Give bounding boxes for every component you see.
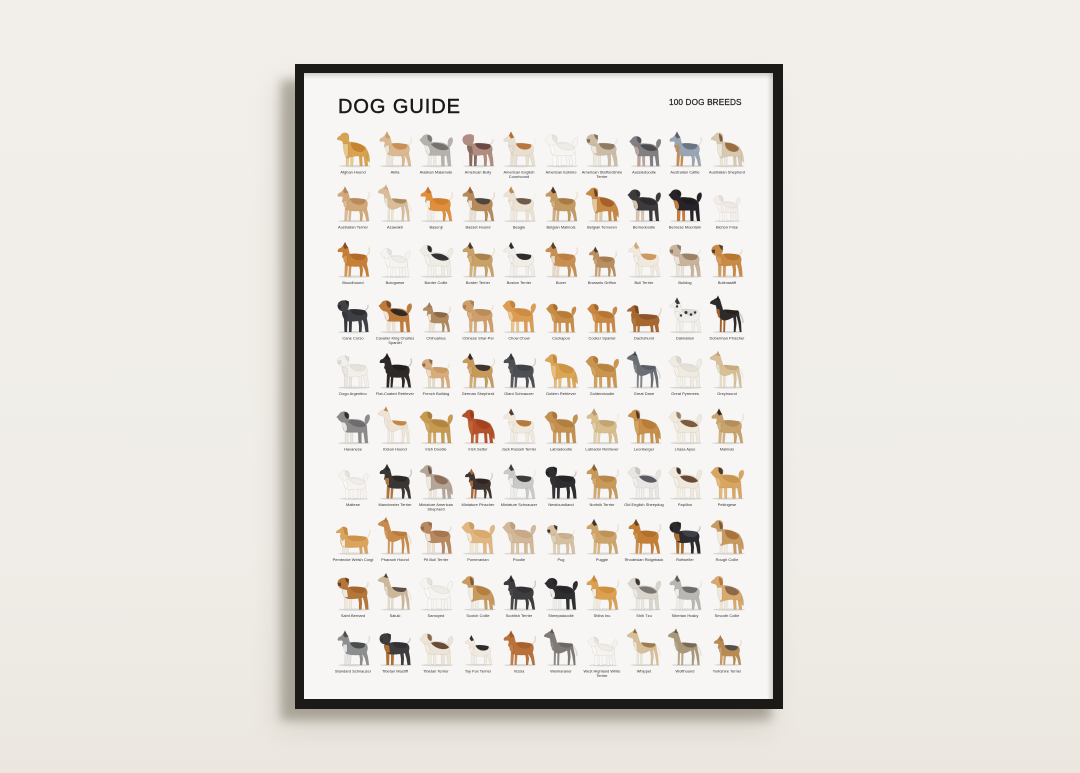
dog: French Bulldog [422,359,451,396]
dog: Azawakh: Azawakh [387,224,403,230]
dog: Dachshund: Dachshund [634,336,654,340]
dog: Pug [547,525,576,562]
dog: Labradoodle [544,412,578,452]
dog: Border Terrier: Border Terrier [466,280,491,285]
dog: Giant Schnauzer [504,353,536,396]
dog: Puggle [587,519,619,562]
dog: Newfoundland: Newfoundland [548,502,574,507]
dog: Australian Cattle [670,132,702,174]
dog: Rottweiler: Rottweiler [676,557,695,562]
dog: Manchester Terrier: Manchester Terrier [378,502,412,507]
dog: Maltese [338,470,368,507]
dog: Australian Terrier [338,186,370,230]
breed grid [333,132,745,678]
dog: Basenji [421,186,453,230]
dog: Whippet: Whippet [637,668,652,674]
poster frame [295,64,783,709]
row 6 [336,406,744,452]
dog: Akita [380,132,412,174]
dog: Bernedoodle: Bernedoodle [633,224,655,230]
dog: Great Pyrenees: Great Pyrenees [671,391,699,396]
dog: Chihuahua [423,302,451,340]
dog: Vizsla [504,630,536,674]
dog: Miniature American Shepherd: Shepherd [427,506,445,511]
dog: Bull Terrier: Bull Terrier [634,280,654,285]
dog: Chinese Shar-Pei [462,300,495,340]
dog: Australian Cattle: Australian Cattle [670,170,700,174]
dog: Lhasa Apso [668,412,702,452]
dog: Pit Bull Terrier: Pit Bull Terrier [424,557,449,562]
dog: Belgian Tervuren [586,188,620,230]
dog: Siberian Husky: Siberian Husky [672,613,698,618]
dog: Labrador Retriever [585,408,619,452]
dog: Samoyed: Samoyed [428,613,444,618]
dog: Goldendoodle: Goldendoodle [590,391,614,396]
dog: Border Collie [420,245,453,285]
row 7 [338,464,744,511]
dog: Afghan Hound [337,133,371,174]
dog: Norfolk Terrier [587,464,619,507]
dog: Miniature Schnauzer: Miniature Schnauzer [501,502,538,507]
dog: Shih Tzu [628,578,661,618]
dog: Irish Setter: Irish Setter [468,446,488,452]
dog: Rhodesian Ridgeback: Rhodesian Ridgeback [625,557,663,562]
dog: Bull Terrier [629,242,661,285]
dog: Flat-Coated Retriever: Flat-Coated Retriever [376,391,415,396]
dog: Chinese Shar-Pei: Chinese Shar-Pei [462,336,494,340]
dog: Shiba Inu: Shiba Inu [594,613,610,618]
dog: Boston Terrier: Boston Terrier [507,280,532,285]
frame shadow [278,80,771,728]
dog: Weimaraner: Weimaraner [550,668,572,674]
dog: Belgian Malinois [546,186,578,230]
dog: American English Coonhound: American English [504,170,534,174]
dog: Scottish Terrier [504,575,536,618]
dog: American Bully [462,134,495,174]
dog: Sheepadoodle [544,578,578,618]
dog: Scotch Collie [462,576,496,618]
dog: Bloodhound [338,242,370,285]
dog: Rottweiler [670,522,702,562]
dog: Leonberger: Leonberger [634,446,655,452]
dog: Bernedoodle [628,190,661,230]
row 4 [338,296,745,345]
dog: Pekingese: Pekingese [718,502,736,507]
dog: Scotch Collie: Scotch Collie [466,613,490,618]
dog: Smooth Collie: Smooth Collie [715,613,739,618]
dog: Aussiedoodle: Aussiedoodle [632,170,656,174]
dog: German Shepherd [462,353,495,396]
dog: Cavalier King Charles Spaniel: Cavalier King Charles [376,336,414,340]
dog: West Highland White Terrier: Terrier [596,673,608,678]
dog: Malinois [712,408,744,452]
dog: Basset Hound [463,186,495,230]
dog: West Highland White Terrier [583,637,621,678]
dog: Bichon Frise [713,195,740,230]
dog: Pit Bull Terrier [420,522,453,562]
dog: Akita: Akita [391,170,400,174]
row 9 [338,573,745,618]
dog: Weimaraner [544,628,577,674]
dog: Newfoundland [546,466,578,507]
dog: Miniature Pinscher: Miniature Pinscher [462,502,495,507]
dog: Golden Retriever: Golden Retriever [546,391,577,396]
dog: Cocker Spaniel: Cocker Spaniel [589,336,616,340]
dog: Saluki [378,573,411,618]
dog: Rough Collie [711,520,745,562]
dog: Pug: Pug [557,557,565,562]
dog: Smooth Collie [711,576,745,618]
dog: Sheepadoodle: Sheepadoodle [548,613,574,618]
dog: Belgian Malinois: Belgian Malinois [547,224,575,230]
dog: Bullmastiff [712,244,744,285]
dog: Malinois: Malinois [720,446,734,452]
dog: Brussels Griffon: Brussels Griffon [588,280,616,285]
dog: Doberman Pinscher: Doberman Pinscher [709,336,745,340]
dog: Siberian Husky [670,575,702,618]
dog: Bernese Mountain: Bernese Mountain [669,224,701,230]
dog: American English Coonhound [504,132,536,179]
dog: Rough Collie: Rough Collie [716,557,738,562]
dog: Cocker Spaniel [587,304,617,340]
dog: American Eskimo: American Eskimo [546,170,576,174]
dog: Manchester Terrier [378,464,412,507]
dog: Standard Schnauzer [335,630,372,674]
dog: Belgian Tervuren: Belgian Tervuren [587,224,617,230]
dog: Bulldog [670,244,702,285]
dog: Yorkshire Terrier: Yorkshire Terrier [713,668,742,674]
dog: Chow Chow: Chow Chow [508,336,530,340]
row 2 [338,184,740,230]
dog: Golden Retriever [545,354,579,396]
dog: Standard Schnauzer: Standard Schnauzer [335,668,372,674]
dog: Ibizan Hound [378,406,411,452]
dog: Cane Corso: Cane Corso [342,336,364,340]
dog: Bullmastiff: Bullmastiff [718,280,737,285]
dog: Puggle: Puggle [596,557,608,562]
dog: Greyhound [710,351,743,396]
dog: Dalmatian [670,298,702,340]
dog: Cockapoo: Cockapoo [552,336,570,340]
dog: Brussels Griffon [588,247,617,285]
dog: Afghan Hound: Afghan Hound [340,170,366,174]
dog: Tibetan Terrier: Tibetan Terrier [423,668,449,674]
dog: Great Dane [627,351,660,396]
dog: Dogo Argentino [338,356,370,396]
dog: Irish Doodle [420,412,453,452]
dog: American Bully: American Bully [465,170,491,174]
dog: Old English Sheepdog [624,467,664,507]
dog: Chihuahua: Chihuahua [426,336,446,340]
dog: Boxer: Boxer [556,280,567,285]
dog: Pharaoh Hound: Pharaoh Hound [381,557,409,562]
dog: Norfolk Terrier: Norfolk Terrier [590,502,615,507]
dog: Miniature American Shepherd: Miniature American [419,502,453,507]
dog: Doberman Pinscher [709,296,745,340]
dog: Dogo Argentino: Dogo Argentino [339,391,367,396]
dog: Alaskan Malamute [420,134,453,174]
dog: Pomeranian: Pomeranian [467,557,489,562]
dog: Bloodhound: Bloodhound [342,280,364,285]
dog: Bolognese [380,248,410,285]
dog: Ibizan Hound: Ibizan Hound [383,446,407,452]
dog: Alaskan Malamute: Alaskan Malamute [420,170,452,174]
dog: Pekingese [710,467,744,507]
dog: Bolognese: Bolognese [386,280,404,285]
dog: Cane Corso [338,300,370,340]
title: DOG GUIDE [338,96,460,118]
dog: Wolfhound [668,628,701,674]
dog: American Staffordshire Terrier: American Staffordshire [582,170,622,174]
dog: Greyhound: Greyhound [717,391,737,396]
dog: Shiba Inu [587,575,619,618]
row 10 [335,628,742,678]
dog: Great Dane: Great Dane [634,391,654,396]
dog: Beagle: Beagle [513,224,525,230]
dog: Jack Russell Terrier [502,408,537,452]
dog: Miniature Schnauzer [501,464,538,507]
dog: Pomeranian [462,522,495,562]
dog: Bulldog: Bulldog [678,280,692,285]
dog: Cockapoo [546,304,576,340]
dog: Havanese [336,412,370,452]
dog: Shih Tzu: Shih Tzu [636,613,652,618]
dog: Wolfhound: Wolfhound [676,668,694,674]
dog: Chow Chow [502,300,536,340]
dog: Basset Hound: Basset Hound [466,224,490,230]
dog: West Highland White Terrier: West Highland White [583,668,621,674]
dog: Australian Shepherd: Australian Shepherd [709,170,745,174]
dog: Saluki: Saluki [390,613,401,618]
dog: Tibetan Mastiff [380,633,412,674]
dog: Cavalier King Charles Spaniel: Spaniel [388,340,402,345]
dog: Toy Fox Terrier: Toy Fox Terrier [465,668,492,674]
dog: Yorkshire Terrier [713,635,742,674]
dog: American Eskimo [544,134,578,174]
dog: Whippet [627,628,660,674]
dog: Giant Schnauzer: Giant Schnauzer [504,391,534,396]
dog: Saint Bernard: Saint Bernard [341,613,365,618]
dog: Tibetan Terrier [420,634,453,674]
dog: Saint Bernard [338,578,370,618]
row 1 [337,132,745,179]
dog: Pembroke Welsh Corgi: Pembroke Welsh Corgi [333,557,373,562]
dog: Dachshund [627,305,661,340]
dog: Pharaoh Hound [378,517,411,562]
dog: Cavalier King Charles Spaniel [376,300,414,345]
dog: Border Terrier [463,242,495,285]
dog: American Staffordshire Terrier: Terrier [596,174,608,179]
row 3 [338,242,744,285]
dog: Jack Russell Terrier: Jack Russell Terrier [502,446,537,452]
dog: Boston Terrier [504,242,536,285]
dog: Vizsla: Vizsla [514,668,525,674]
dog: Irish Doodle: Irish Doodle [425,446,447,452]
dog: Aussiedoodle [629,136,661,174]
row 8 [333,517,745,562]
dog: Tibetan Mastiff: Tibetan Mastiff [382,668,409,674]
dog: Poodle: Poodle [513,557,525,562]
dog: Azawakh [378,184,411,230]
dog: American Staffordshire Terrier [582,134,622,179]
dog: Samoyed [420,578,453,618]
subtitle: 100 dog breeds: 100 DOG BREEDS [669,98,742,107]
dog: Pembroke Welsh Corgi [333,527,373,562]
row 5 [338,351,743,396]
dog: Papillon: Papillon [678,502,692,507]
dog: Labrador Retriever: Labrador Retriever [585,446,619,452]
dog: Papillon [668,467,702,507]
dog: Poodle [502,522,536,562]
dog: Flat-Coated Retriever [376,353,415,396]
dog: Bichon Frise: Bichon Frise [716,224,738,230]
dog: Australian Terrier: Australian Terrier [338,224,369,230]
dog: Basenji: Basenji [429,224,443,230]
dog: German Shepherd: German Shepherd [462,391,494,396]
dog: Bernese Mountain [668,190,702,230]
dog: Leonberger [628,410,662,452]
dog: Dalmatian: Dalmatian [676,336,694,340]
dog: Old English Sheepdog: Old English Sheepdog [624,502,664,507]
dog: Toy Fox Terrier [465,635,493,674]
dog: Border Collie: Border Collie [424,280,448,285]
dog: Labradoodle: Labradoodle [550,446,572,452]
dog: Boxer [546,242,578,285]
dog: Rhodesian Ridgeback [625,519,663,562]
dog: French Bulldog: French Bulldog [423,391,449,396]
dog: Maltese: Maltese [346,502,360,507]
dog: Beagle [504,186,536,230]
dog: Great Pyrenees [668,356,702,396]
dog: Miniature Pinscher [462,469,495,507]
dog: Goldendoodle [586,356,619,396]
dog: Australian Shepherd [709,133,745,174]
dog: Lhasa Apso: Lhasa Apso [675,446,695,452]
dog: American English Coonhound: Coonhound [509,174,529,179]
dog: Irish Setter [462,410,496,452]
dog: Miniature American Shepherd [419,465,454,511]
dog: Havanese: Havanese [344,446,362,452]
dog: Scottish Terrier: Scottish Terrier [506,613,533,618]
